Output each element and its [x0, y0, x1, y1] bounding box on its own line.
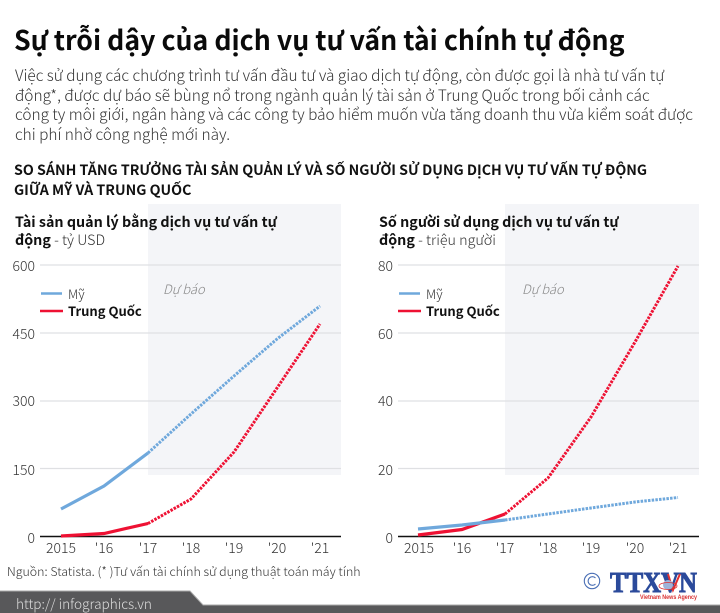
icon: copyright	[584, 573, 600, 589]
section heading	[14, 160, 647, 200]
intro text: động*, được dự báo sẽ bùng nổ trong ngành quản lý tài sản ở Trung Quốc trong bối cảnh các	[15, 84, 650, 106]
axis labels: 150	[13, 460, 35, 480]
logo wordmark: Vietnam News Agency	[640, 595, 698, 601]
logo wordmark: TTXVN	[610, 568, 697, 599]
chart 2 heading: động - triệu người	[379, 228, 496, 250]
axis labels: '18	[182, 538, 200, 558]
axis labels: 0	[28, 528, 35, 548]
title: Sự trỗi dậy của dịch vụ tư vấn tài chính tự động	[14, 19, 625, 58]
axis labels: 300	[13, 391, 35, 411]
legend: Mỹ	[426, 284, 443, 303]
intro text: công ty môi giới, ngân hàng và các công ty bảo hiểm muốn vừa tăng doanh thu vừa kiểm soát được	[15, 103, 693, 125]
axis labels: '21	[669, 538, 687, 558]
chart 2 heading	[379, 211, 619, 250]
section heading: SO SÁNH TĂNG TRƯỞNG TÀI SẢN QUẢN LÝ VÀ SỐ NGƯỜI SỬ DỤNG DỊCH VỤ TƯ VẤN TỰ ĐỘNG	[14, 160, 647, 180]
axis labels: '19	[225, 538, 243, 558]
legend	[398, 284, 500, 320]
intro text: chi phí nhờ công nghệ mới này.	[15, 122, 230, 144]
chart: number of users	[378, 204, 699, 558]
axis labels	[378, 256, 687, 558]
axis labels: '17	[139, 538, 157, 558]
line: US	[418, 498, 678, 529]
axis labels: '17	[496, 538, 514, 558]
axis labels: 40	[378, 391, 393, 411]
axis labels: '21	[311, 538, 329, 558]
axis labels: 2015	[46, 538, 76, 558]
axis labels: 80	[378, 256, 393, 276]
line: China	[61, 324, 320, 536]
axis labels: 0	[386, 528, 393, 548]
axis labels: 20	[378, 460, 393, 480]
section heading: GIỮA MỸ VÀ TRUNG QUỐC	[14, 180, 191, 200]
footer url: http:// infographics.vn	[16, 593, 152, 613]
axis labels: '16	[453, 538, 471, 558]
axis labels: '19	[582, 538, 600, 558]
axis labels: '20	[268, 538, 286, 558]
axis labels: '16	[95, 538, 113, 558]
intro text: Việc sử dụng các chương trình tư vấn đầu tư và giao dịch tự động, còn được gọi là nhà tư vấn tự	[15, 64, 664, 86]
legend	[40, 284, 142, 320]
chart 2 heading: Số người sử dụng dịch vụ tư vấn tự	[379, 211, 618, 232]
legend: Trung Quốc	[68, 301, 142, 320]
axis labels: 60	[378, 324, 393, 344]
axis labels: '18	[539, 538, 557, 558]
forecast label: Dự báo	[163, 279, 206, 298]
chart 1 heading: Tài sản quản lý bằng dịch vụ tư vấn tự	[15, 211, 277, 232]
line: US	[61, 306, 320, 509]
axis labels	[13, 256, 329, 558]
line: China	[418, 266, 678, 535]
axis labels: 2015	[404, 538, 434, 558]
forecast label: Dự báo	[522, 279, 565, 298]
axis labels: '20	[626, 538, 644, 558]
chart 1 heading	[15, 211, 278, 250]
axis labels: 600	[13, 256, 35, 276]
chart 1 heading: động - tỷ USD	[15, 228, 105, 250]
intro text	[15, 64, 693, 144]
source note: Nguồn: Statista. (* )Tư vấn tài chính sử dụng thuật toán máy tính	[7, 562, 361, 580]
axis labels: 450	[13, 324, 35, 344]
legend: Mỹ	[68, 284, 85, 303]
legend: Trung Quốc	[426, 301, 500, 320]
chart: assets under management	[13, 204, 341, 558]
